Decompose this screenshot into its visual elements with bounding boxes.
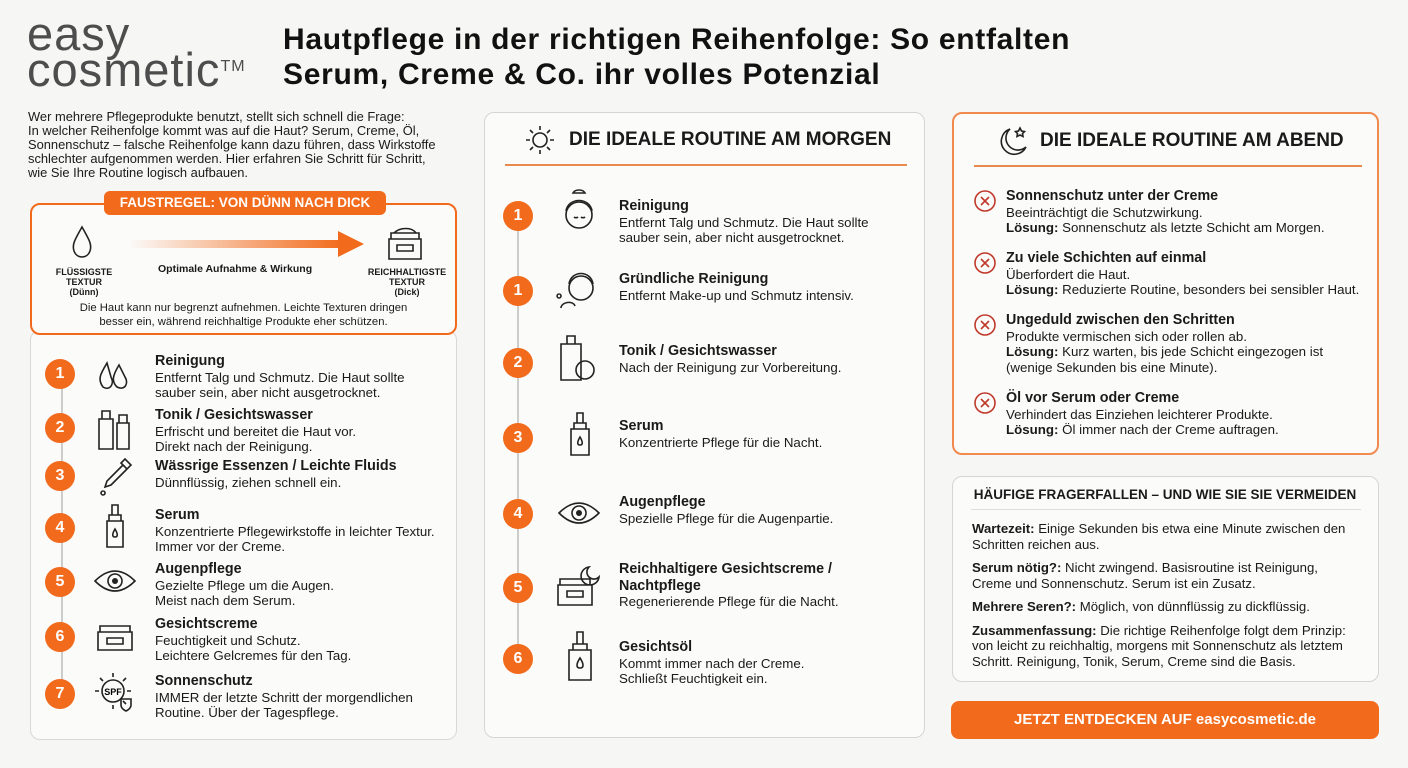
m step 2: 1 [514, 282, 522, 299]
m step 7: Kommt immer nach der Creme. [619, 656, 804, 670]
m step 4: Serum [619, 418, 664, 434]
m step 7: Gesichtsöl [619, 639, 692, 655]
mistake 4: Öl vor Serum oder Creme [1006, 390, 1179, 406]
heading: DIE IDEALE ROUTINE AM MORGEN [569, 129, 891, 150]
step 5: Augenpflege [155, 561, 242, 577]
faustregel label: FAUSTREGEL: VON DÜNN NACH DICK [120, 195, 370, 210]
step 6: Leichtere Gelcremes für den Tag. [155, 648, 351, 663]
faq text: Zusammenfassung: Die richtige Reihenfolge folgt dem Prinzip: [972, 622, 1346, 638]
step 2: Erfrischt und bereitet die Haut vor. [155, 424, 356, 438]
intro text: schlechter aufgenommen werden. Hier erfahren Sie Schritt für Schritt, [28, 151, 426, 166]
intro text: wie Sie Ihre Routine logisch aufbauen. [28, 165, 248, 180]
mistake 2: Lösung: Reduzierte Routine, besonders bei sensibler Haut. [1006, 282, 1359, 297]
faq heading: HÄUFIGE FRAGERFALLEN – UND WIE SIE SIE VERMEIDEN [974, 487, 1356, 502]
panel: left steps [30, 330, 457, 740]
panel: faustregel: FLÜSSIGSTE [56, 267, 112, 277]
faq text: Schritt. Reinigung, Tonik, Serum, Creme sind die Basis. [972, 654, 1296, 668]
m step 5 [503, 494, 833, 529]
mistake 1 [974, 188, 1325, 235]
mistake 1: Beeinträchtigt die Schutzwirkung. [1006, 204, 1203, 220]
step 2: Tonik / Gesichtswasser [155, 407, 313, 423]
title: Hautpflege in der richtigen Reihenfolge: So entfalten [283, 23, 1070, 56]
panel: faustregel: (Dick) [394, 287, 420, 297]
panel: faustregel: besser ein, während reichhaltige Produkte eher schützen. [99, 316, 388, 328]
m step 1 [503, 189, 869, 245]
panel: faustregel: Die Haut kann nur begrenzt aufnehmen. Leichte Texturen dringen [80, 302, 407, 314]
panel: faustregel: REICHHALTIGSTE [368, 267, 446, 277]
m step 6: 5 [514, 579, 522, 596]
faq text: Creme und Sonnenschutz. Serum ist ein Zusatz. [972, 576, 1256, 590]
logo [27, 7, 246, 96]
m step 1: Entfernt Talg und Schmutz. Die Haut sollte [619, 214, 869, 230]
step 2: 2 [56, 419, 64, 436]
step 4: Konzentrierte Pflegewirkstoffe in leichter Textur. [155, 524, 435, 538]
intro text [28, 109, 436, 180]
m step 7 [503, 631, 804, 686]
panel: morning routine: Reichhaltigere Gesichtscreme / [619, 561, 832, 577]
step 3: 3 [56, 467, 64, 484]
panel: faustregel: Optimale Aufnahme & Wirkung [158, 263, 312, 275]
heading: DIE IDEALE ROUTINE AM ABEND [1040, 130, 1344, 151]
faustregel label [104, 191, 386, 215]
step 1: sauber sein, aber nicht ausgetrocknet. [155, 385, 380, 400]
step 4 [45, 504, 435, 554]
faq text: Schritten reichen aus. [972, 536, 1100, 552]
title: Serum, Creme & Co. ihr volles Potenzial [283, 58, 880, 91]
mistake 2: Überfordert die Haut. [1006, 266, 1130, 282]
m step 6: Nachtpflege [619, 578, 701, 594]
step 4: 4 [56, 519, 64, 536]
m step 4: Konzentrierte Pflege für die Nacht. [619, 434, 822, 450]
step 7: IMMER der letzte Schritt der morgendlichen [155, 690, 413, 704]
title [283, 23, 1070, 91]
m step 2: Entfernt Make-up und Schmutz intensiv. [619, 288, 854, 302]
step 2: Direkt nach der Reinigung. [155, 439, 312, 454]
panel: morning routine [484, 112, 925, 738]
m step 5: 4 [514, 505, 522, 522]
step 5: Gezielte Pflege um die Augen. [155, 578, 334, 592]
step 3: Dünnflüssig, ziehen schnell ein. [155, 474, 341, 490]
step 5 [45, 561, 334, 608]
panel: faustregel [30, 203, 457, 335]
mistake 4: Verhindert das Einziehen leichterer Produkte. [1006, 406, 1273, 422]
panel: faustregel: TEXTUR [66, 277, 102, 287]
m step 7: Schließt Feuchtigkeit ein. [619, 671, 768, 686]
icon: jar [388, 228, 422, 260]
m step 6: Regenerierende Pflege für die Nacht. [619, 594, 839, 609]
intro text: In welcher Reihenfolge kommt was auf die Haut? Serum, Creme, Öl, [28, 123, 419, 138]
mistake 3: Produkte vermischen sich oder rollen ab. [1006, 328, 1247, 344]
mistake 4 [974, 389, 1279, 437]
step 2 [45, 407, 356, 454]
step 6: Gesichtscreme [155, 616, 258, 632]
mistake 3: Lösung: Kurz warten, bis jede Schicht eingezogen ist [1006, 344, 1323, 359]
m step 1: sauber sein, aber nicht ausgetrocknet. [619, 230, 844, 245]
m step 3: Nach der Reinigung zur Vorbereitung. [619, 360, 842, 374]
step 6: 6 [56, 628, 64, 645]
step 5: 5 [56, 573, 64, 590]
logo: easy [27, 7, 130, 60]
timeline line [61, 371, 63, 701]
CTA button: JETZT ENTDECKEN AUF easycosmetic.de [1014, 711, 1316, 728]
step 3: Wässrige Essenzen / Leichte Fluids [155, 458, 397, 474]
step 1: Reinigung [155, 353, 225, 369]
step 1 [45, 353, 405, 400]
mistake 1: Lösung: Sonnenschutz als letzte Schicht am Morgen. [1006, 220, 1325, 235]
m step 3: Tonik / Gesichtswasser [619, 343, 777, 359]
heading [526, 126, 891, 154]
mistake 2: Zu viele Schichten auf einmal [1006, 250, 1206, 266]
intro text: Sonnenschutz – falsche Reihenfolge kann dazu führen, dass Wirkstoffe [28, 137, 436, 152]
step 7: SPF [104, 687, 122, 697]
panel: evening mistakes [952, 112, 1379, 455]
intro text: Wer mehrere Pflegeprodukte benutzt, stellt sich schnell die Frage: [28, 109, 405, 124]
mistake 3: (wenige Sekunden bis eine Minute). [1006, 360, 1217, 374]
faq text: Serum nötig?: Nicht zwingend. Basisroutine ist Reinigung, [972, 560, 1318, 575]
m step 3 [503, 335, 842, 381]
heading [1000, 126, 1344, 156]
faq text [972, 521, 1346, 668]
icon: drop [72, 226, 92, 258]
panel: FAQ [952, 476, 1379, 682]
logo: cosmeticTM [27, 43, 246, 96]
step 7: Sonnenschutz [155, 673, 253, 689]
step 4: Serum [155, 507, 200, 523]
m step 7: 6 [514, 650, 522, 667]
faq text: von leicht zu reichhaltig, morgens mit Sonnenschutz als letztem [972, 638, 1343, 653]
m step 5: Spezielle Pflege für die Augenpartie. [619, 510, 833, 526]
mistake 3 [974, 312, 1323, 374]
m step 3: 2 [514, 354, 522, 371]
m step 5: Augenpflege [619, 494, 706, 510]
panel: faustregel: (Dünn) [70, 287, 98, 297]
step 6 [45, 616, 351, 663]
mistake 1: Sonnenschutz unter der Creme [1006, 188, 1218, 204]
m step 4 [503, 412, 822, 456]
arrow [136, 231, 364, 257]
panel: faustregel: TEXTUR [389, 277, 425, 287]
mistake 2 [974, 250, 1359, 297]
faq text: Mehrere Seren?: Möglich, von dünnflüssig zu dickflüssig. [972, 599, 1310, 614]
step 7 [45, 673, 413, 720]
CTA button [951, 701, 1379, 739]
m step 1: Reinigung [619, 198, 689, 214]
m step 4: 3 [514, 429, 522, 446]
step 4: Immer vor der Creme. [155, 539, 285, 554]
m step 6 [503, 561, 839, 609]
step 7: Routine. Über der Tagespflege. [155, 705, 339, 720]
m step 1: 1 [514, 207, 522, 224]
step 7: 7 [56, 685, 64, 702]
m step 2 [503, 271, 854, 308]
mistake 3: Ungeduld zwischen den Schritten [1006, 312, 1235, 328]
step 1: 1 [56, 365, 64, 382]
m step 2: Gründliche Reinigung [619, 271, 768, 287]
step 5: Meist nach dem Serum. [155, 593, 295, 608]
step 3 [45, 458, 397, 496]
step 1: Entfernt Talg und Schmutz. Die Haut sollte [155, 370, 405, 384]
mistake 4: Lösung: Öl immer nach der Creme auftragen. [1006, 422, 1279, 437]
step 6: Feuchtigkeit und Schutz. [155, 632, 301, 648]
faq text: Wartezeit: Einige Sekunden bis etwa eine Minute zwischen den [972, 521, 1345, 536]
